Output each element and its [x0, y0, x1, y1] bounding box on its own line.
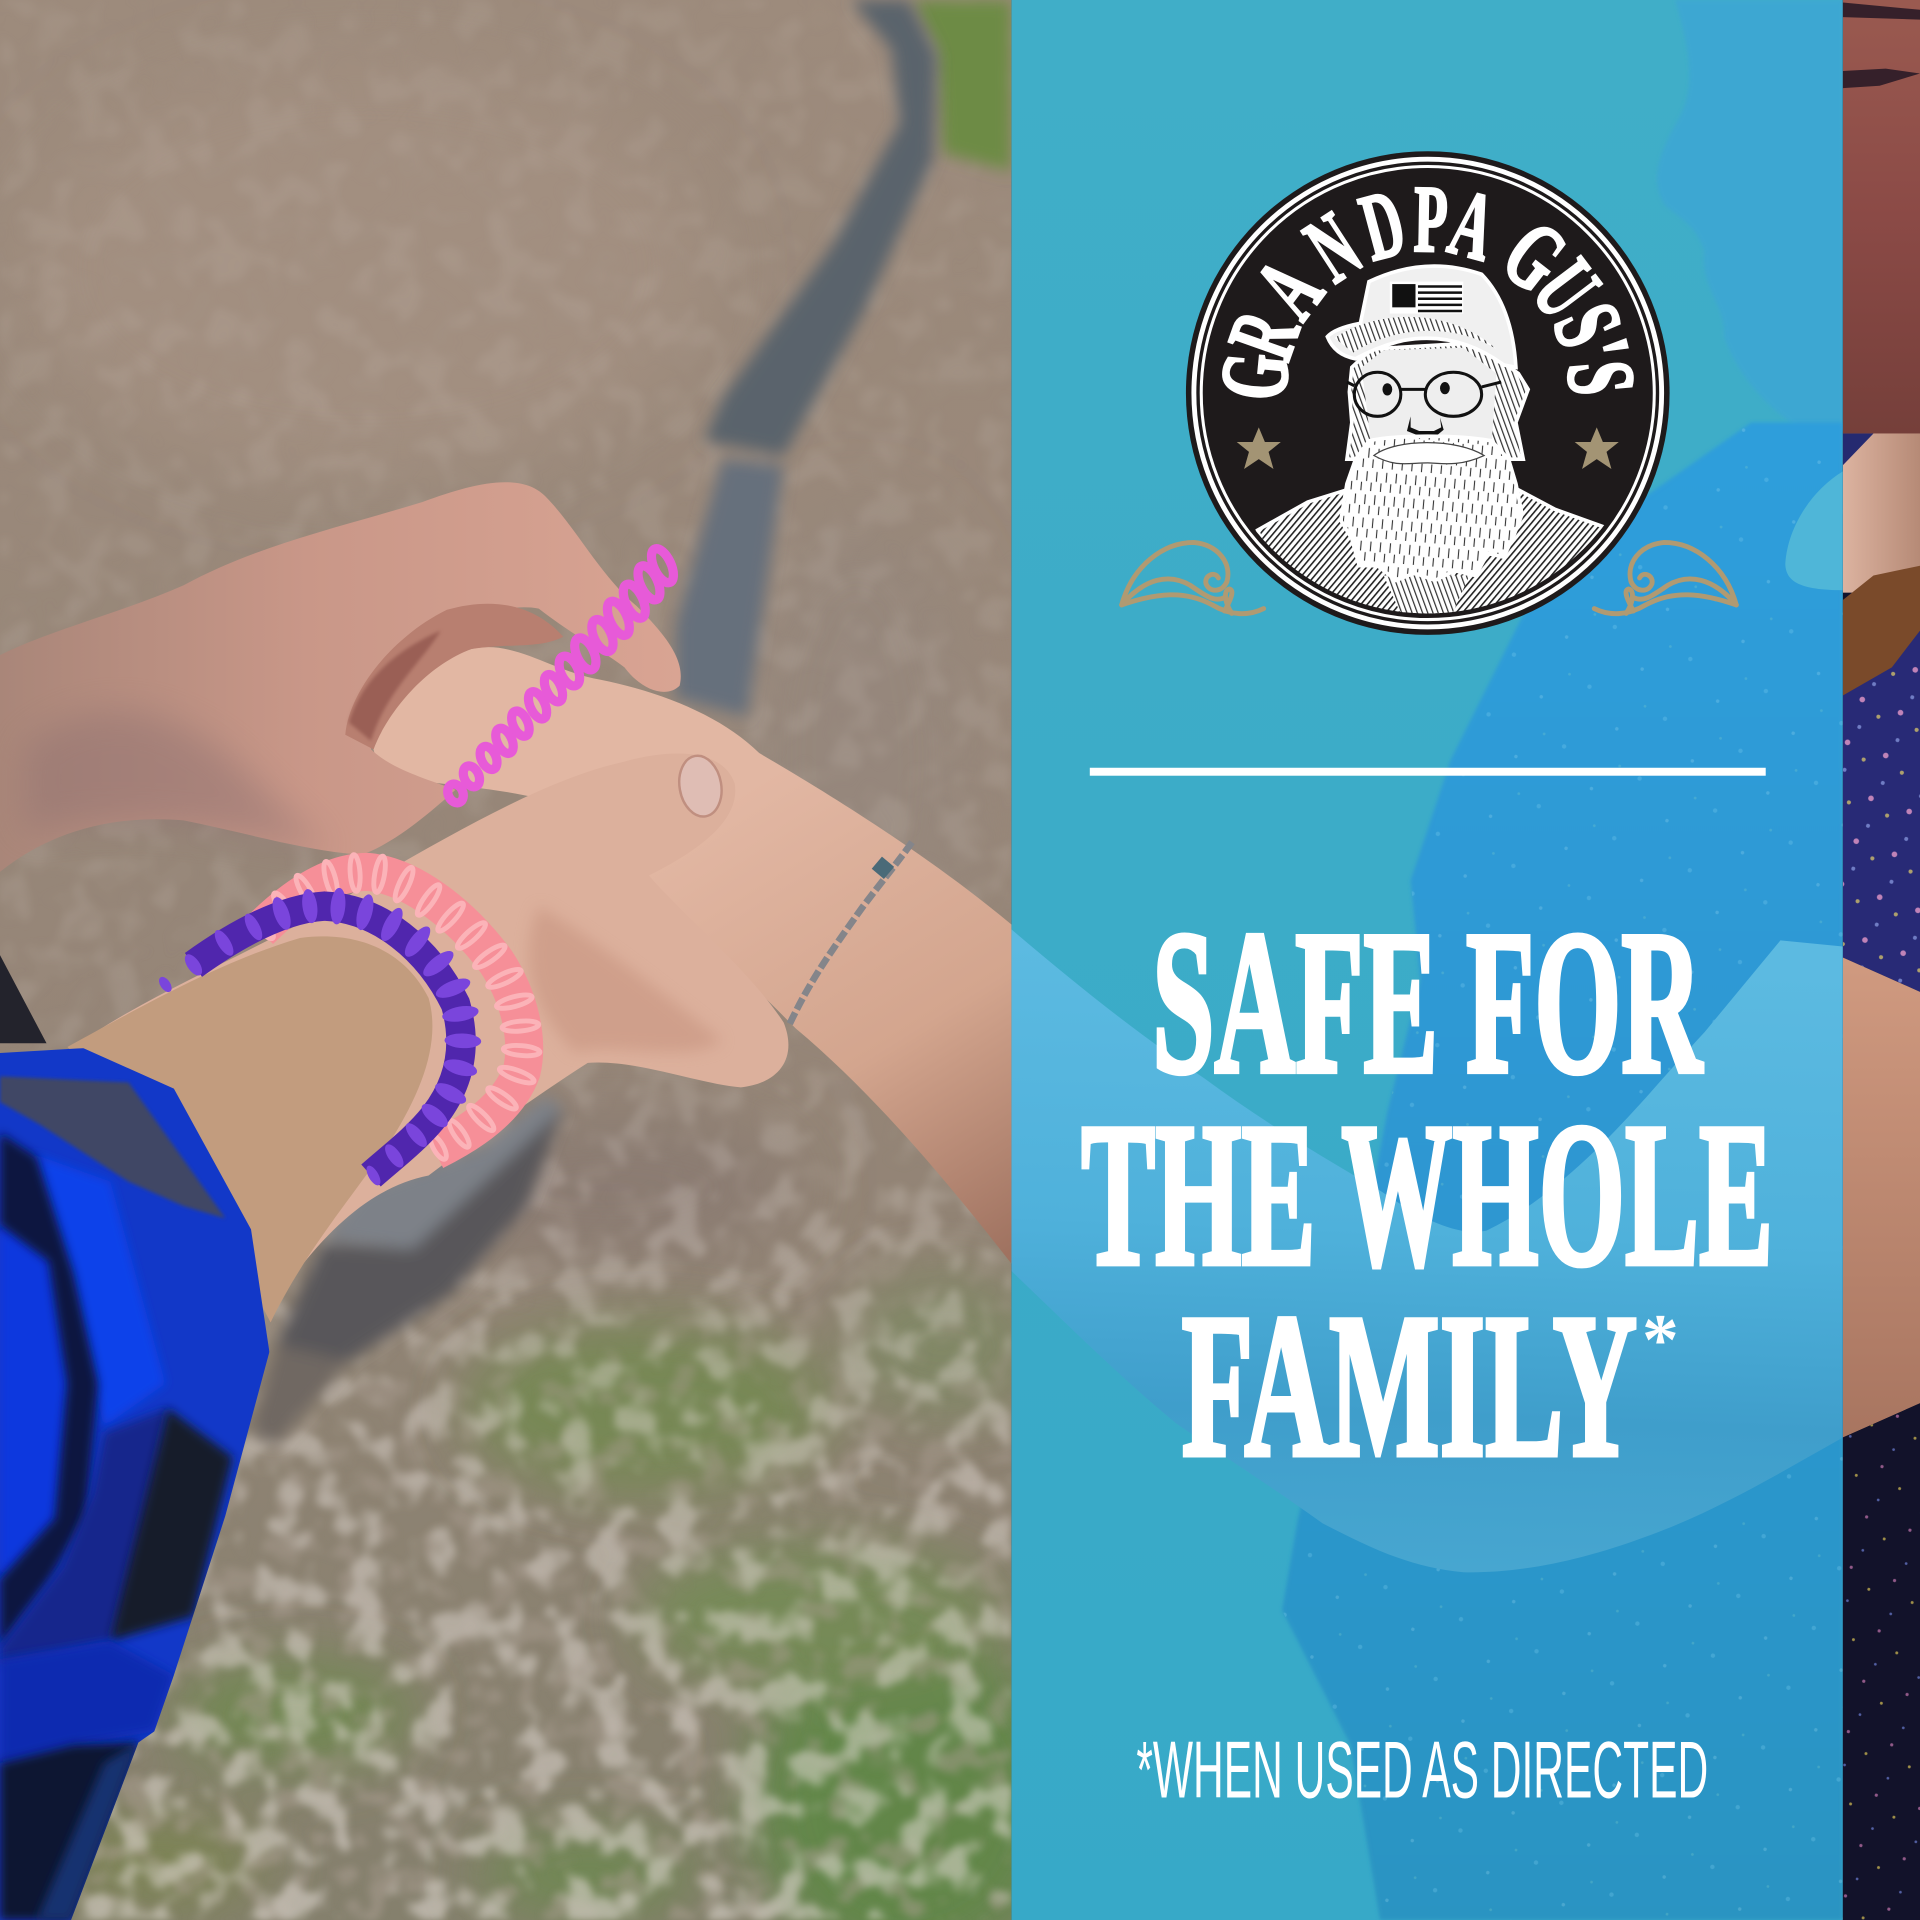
left flourish: [1122, 542, 1264, 614]
ground tonal patches: [205, 397, 723, 1220]
forearm: [67, 936, 432, 1322]
right flourish: [1594, 542, 1736, 614]
hair and face: [1347, 343, 1528, 459]
cap brim lines: [1335, 317, 1496, 353]
mustache and mouth: [1374, 443, 1484, 464]
panel: blue overlay with child silhouette: [1011, 0, 1843, 1920]
shirt collar: [1384, 576, 1469, 631]
teal base: [1011, 0, 1843, 1920]
magenta coil bracelet: [445, 545, 678, 805]
brand name arc text: D: [1350, 169, 1415, 281]
silhouette: arm: [1011, 929, 1843, 1572]
beard: [1341, 436, 1522, 580]
lower blue check: [0, 1641, 174, 1763]
fold shadow: [0, 1133, 98, 1647]
strip: shirt base: [1843, 0, 1920, 1920]
bright blue stripe: [32, 1153, 165, 1427]
brand name arc text: R: [1207, 298, 1320, 371]
brand name arc text: P: [1413, 165, 1449, 272]
strip: collar: [1843, 433, 1873, 465]
brand name arc text: S: [1532, 290, 1642, 361]
brand name arc text: [1200, 165, 1655, 404]
stars: [1237, 427, 1619, 469]
silver bracelet: [790, 840, 913, 1024]
strip: face skin: [1843, 0, 1920, 435]
dark flecks: [80, 1205, 1011, 1920]
logo: Grandpa Gus's badge: [1122, 151, 1736, 637]
headline: [1081, 889, 1773, 1500]
brand name arc text: N: [1288, 192, 1378, 302]
strip: eyebrow and eye: [1843, 2, 1920, 88]
pink coil bracelet: [250, 854, 540, 1161]
silhouette: neckline: [1785, 471, 1843, 590]
palm interior shadow: [349, 631, 441, 741]
strip: sleeve: [1843, 576, 1920, 992]
engraved portrait: [1258, 266, 1603, 637]
divider line: [1090, 768, 1766, 776]
panel: right photo strip: [1843, 0, 1920, 1920]
panel: photo of hands and bracelets: [0, 0, 1065, 1920]
brand name arc text: G: [1484, 201, 1585, 312]
grey check: [0, 1076, 225, 1218]
lower adult hand: [67, 752, 788, 1322]
brand name arc text: S: [1546, 357, 1655, 399]
light flecks: [0, 0, 1011, 1920]
hand main shape: [0, 482, 681, 872]
back of hand shading: [24, 712, 331, 851]
purple band: [193, 906, 461, 1176]
upper adult hand: [0, 482, 681, 872]
top-right grass: [912, 0, 1011, 171]
strip: neck: [1843, 433, 1920, 593]
strip: sleeve dots: [1843, 576, 1920, 992]
brand name arc text: U: [1513, 241, 1621, 336]
cap: [1327, 266, 1516, 367]
gravel ground: [0, 0, 1011, 1920]
brand name arc text: ': [1543, 329, 1650, 373]
child's arm and hand: [373, 647, 1011, 1264]
silhouette: shirt: [1282, 422, 1843, 1920]
brand name arc text: A: [1440, 168, 1506, 281]
strip: arm skin: [1843, 958, 1920, 1438]
blue plaid sleeve: [0, 1041, 276, 1920]
left bright blue: [0, 1224, 67, 1580]
silhouette: face: [1657, 0, 1843, 431]
purple rings: [156, 887, 481, 1188]
strip: lower shirt dots: [1843, 1403, 1920, 1920]
strip: lower shirt: [1843, 1403, 1920, 1920]
cap flag patch: [1390, 282, 1463, 313]
thumbnail: [675, 752, 726, 820]
headline asterisk: *: [1642, 1299, 1679, 1380]
pink rings: [250, 854, 540, 1161]
glasses: [1347, 372, 1501, 416]
pink band: [260, 872, 524, 1151]
eyes and nose: [1382, 382, 1450, 436]
playground curb: [251, 0, 937, 1445]
shoulders: [1258, 490, 1603, 637]
lower dark cuff: [0, 1742, 138, 1920]
purple coil bracelet: [156, 887, 481, 1188]
cuff edge: [37, 1742, 138, 1920]
grass patches: [49, 1273, 1065, 1920]
badge circle: [1186, 151, 1670, 635]
strip: hair: [1843, 566, 1920, 696]
black check: [110, 1408, 233, 1641]
curled finger fill: [345, 604, 563, 749]
face skin: [1362, 348, 1496, 447]
silhouette: shirt speckles: [1282, 422, 1843, 1920]
hand main shape: [73, 754, 788, 1310]
dark blue check: [0, 1408, 168, 1665]
dark strap behind sleeve: [0, 955, 47, 1043]
brand name arc text: A: [1234, 240, 1343, 336]
brand name arc text: G: [1200, 348, 1310, 404]
knuckle shading: [529, 906, 722, 1053]
gravel texture: [5, 305, 1012, 1920]
